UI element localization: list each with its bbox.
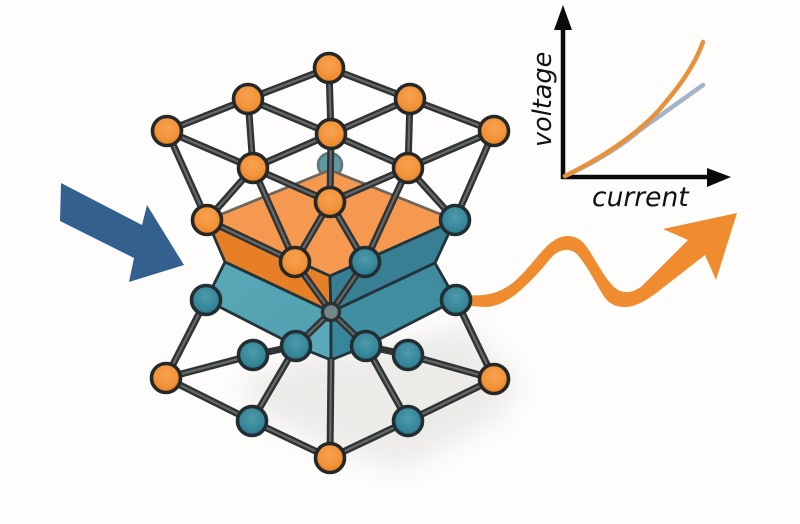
x axis arrow (561, 175, 715, 179)
teal bottom right facet (331, 312, 366, 360)
teal atoms (192, 206, 470, 436)
orange wavy output arrow (470, 213, 737, 307)
orange front-left face (207, 220, 331, 312)
x arrowhead (707, 168, 731, 187)
blue linear curve (565, 85, 703, 176)
central grey atom (322, 304, 340, 320)
teal lower left face (206, 262, 331, 346)
lattice structure (152, 54, 508, 472)
y arrowhead (554, 5, 572, 30)
bonds inner highlight (166, 68, 494, 458)
x axis label: current (592, 182, 690, 213)
teal bottom left facet (296, 312, 331, 360)
blue input arrow (60, 183, 184, 282)
orange top face (207, 170, 455, 276)
teal lower right face (331, 263, 456, 346)
teal upper right face (330, 220, 455, 312)
orange nonlinear curve (565, 42, 703, 176)
voltage-current chart (528, 5, 731, 213)
bonds outer (166, 68, 494, 458)
floor shadow (240, 325, 520, 470)
y axis label: voltage (528, 52, 558, 147)
y axis arrow (561, 20, 565, 179)
back teal atom (318, 153, 342, 177)
orange atoms (152, 54, 508, 472)
